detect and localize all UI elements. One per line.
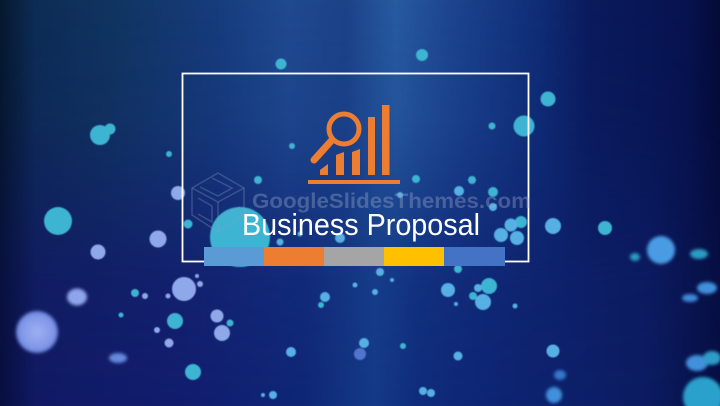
watermark logo — [192, 173, 244, 232]
watermark text: GoogleSlidesThemes.com — [252, 190, 531, 213]
icon: magnifier over bar chart — [308, 105, 400, 184]
bubbles: teal and periwinkle particles — [44, 49, 612, 399]
colour bar — [204, 247, 505, 266]
bubbles: blurred foreground particles — [16, 236, 720, 406]
title: Business Proposal — [242, 207, 480, 242]
white frame — [182, 74, 528, 262]
